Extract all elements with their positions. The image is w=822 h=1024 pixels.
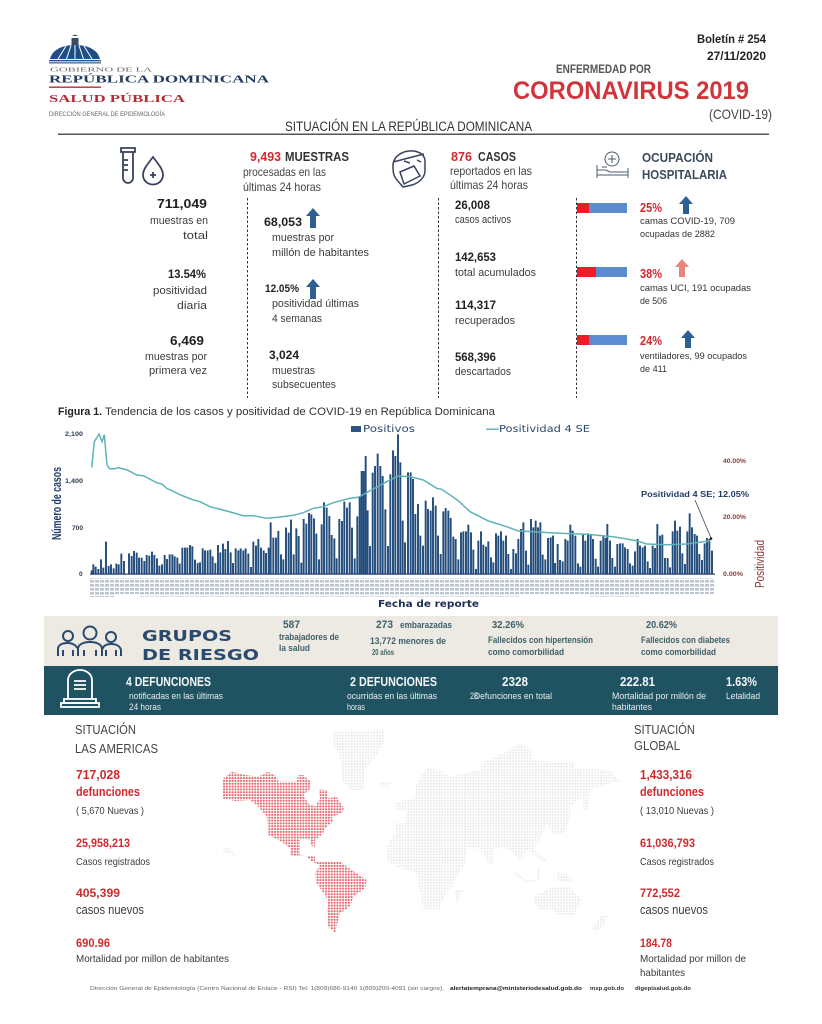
panel: situation in the Americas: defunciones	[76, 785, 140, 799]
column: case indicators: descartados	[455, 366, 511, 378]
logo: Gobierno de la República Dominicana, Salud Pública: GOBIERNO DE LA	[50, 68, 153, 74]
column: case indicators: recuperados	[455, 315, 515, 327]
stat: mortality: habitantes	[612, 702, 652, 713]
column: case indicators: total acumulados	[455, 267, 536, 279]
line: positivity 4 SE	[92, 434, 710, 545]
chart heading: Figura 1.	[58, 406, 102, 418]
panel: global situation: ( 13,010 Nuevas )	[640, 805, 714, 817]
bar: camas COVID-19	[577, 203, 627, 213]
stat: pregnant and minors: 20 años	[372, 648, 394, 657]
logo: Gobierno de la República Dominicana, Salud Pública	[49, 34, 270, 118]
column: sample totals: total	[183, 230, 208, 242]
arrow: up	[681, 330, 695, 348]
panel: hospital occupancy: 25%	[640, 201, 662, 215]
title	[513, 62, 772, 122]
panel: global situation: GLOBAL	[634, 738, 680, 753]
column: sample totals: diaria	[177, 300, 208, 312]
panel: global situation: 61,036,793	[640, 838, 695, 850]
chart heading: Tendencia de los casos y positividad de COVID-19 en República Dominicana	[105, 406, 496, 418]
panel: cases heading: últimas 24 horas	[450, 178, 528, 192]
axis labels: positivity: 40.00%	[723, 458, 746, 465]
footer: Dirección General de Epidemiología (Centro Nacional de Enlace - RSI) Tel: 1(809)686-9140 1(809)200-4091 (sin cargos).	[90, 986, 445, 992]
column: sample totals: positividad	[153, 285, 207, 297]
bulletin number and date: Boletín # 254	[697, 32, 766, 46]
panel: cases heading	[450, 149, 532, 192]
stat: occurred deaths	[347, 675, 437, 713]
panel: cases heading: reportados en las	[450, 164, 532, 178]
arrow: up light	[675, 259, 689, 277]
column: sample indicators: 68,053	[264, 215, 302, 229]
panel: samples heading: últimas 24 horas	[243, 180, 321, 194]
column: case indicators	[455, 200, 536, 378]
panel: situation in the Americas: 25,958,213	[76, 838, 130, 850]
stat: health workers	[279, 619, 339, 654]
heading: Grupos de riesgo	[142, 627, 259, 664]
column: sample indicators: 4 semanas	[272, 313, 322, 325]
stat: occurred deaths: ocurridas en las últimas	[347, 691, 437, 702]
panel: hospital occupancy: ventiladores, 99 ocupados	[640, 351, 747, 362]
icon: dome	[49, 34, 101, 64]
panel: situation in the Americas: 405,399	[76, 886, 120, 900]
heading: Grupos de riesgo: DE RIESGO	[142, 646, 259, 664]
panel: situation in the Americas	[75, 722, 229, 965]
column: sample indicators: subsecuentes	[272, 379, 336, 391]
panel: hospital occupancy: 24%	[640, 334, 662, 348]
axis labels: positivity: 0.00%	[723, 571, 743, 578]
stat: lethality	[726, 675, 760, 702]
stat: lethality: Letalidad	[726, 691, 760, 702]
panel: situation in the Americas: Mortalidad por millon de habitantes	[76, 953, 229, 965]
axis labels: cases: 0	[79, 571, 83, 578]
legend: Positividad 4 SE	[499, 424, 590, 435]
icon: test tube and drop	[121, 148, 163, 184]
stat: diabetes: como comorbilidad	[641, 647, 716, 658]
axis labels: positivity: 20.00%	[723, 514, 746, 521]
panel: samples heading: 9,493	[250, 149, 281, 164]
stat: hypertension	[488, 619, 593, 658]
footer: alertatemprana@ministeriodesalud.gob.do	[450, 986, 583, 992]
panel: global situation: SITUACIÓN	[634, 722, 695, 737]
bars: left half	[92, 434, 398, 574]
bars: right half	[400, 462, 712, 574]
stat: occurred deaths: 2 DEFUNCIONES	[350, 675, 437, 689]
panel: global situation: defunciones	[640, 785, 704, 799]
logo: Gobierno de la República Dominicana, Salud Pública: DIRECCIÓN GENERAL DE EPIDEMIOLOGÍA	[49, 111, 165, 118]
column: sample indicators: muestras por	[272, 232, 334, 244]
stat: health workers: trabajadores de	[279, 632, 339, 643]
stat: pregnant and minors: embarazadas	[400, 620, 452, 631]
axis labels: cases: 2,100	[65, 431, 83, 438]
panel: situation in the Americas: Casos registrados	[76, 856, 150, 868]
stat: mortality: Mortalidad por millón de	[612, 691, 706, 702]
stat: pregnant and minors: 13,772 menores de	[370, 636, 446, 647]
panel: global situation	[634, 722, 746, 979]
panel: hospital occupancy: 38%	[640, 267, 662, 281]
panel: hospital heading	[642, 150, 728, 182]
footer	[90, 986, 692, 992]
panel: global situation: casos nuevos	[640, 903, 708, 917]
callout: positivity value: Positividad 4 SE; 12.05%	[641, 490, 749, 499]
map: the Americas	[223, 772, 367, 933]
stat: hypertension: Fallecidos con hipertensión	[488, 635, 593, 646]
column: sample indicators: 3,024	[269, 348, 299, 362]
arrow: up	[306, 208, 320, 228]
bulletin number and date	[697, 32, 766, 63]
panel: samples heading: MUESTRAS	[285, 149, 349, 164]
column: case indicators: 114,317	[455, 300, 496, 312]
column: sample totals: muestras por	[145, 351, 207, 363]
panel: global situation: 1,433,316	[640, 768, 692, 782]
axis labels: cases: 1,400	[65, 478, 83, 485]
panel: hospital occupancy: de 411	[640, 364, 667, 375]
panel: cases heading: 876	[451, 149, 472, 164]
stat: notified deaths	[126, 675, 223, 713]
panel: cases heading: CASOS	[478, 149, 516, 164]
column: case indicators: 26,008	[455, 200, 491, 212]
stat: diabetes: 20.62%	[646, 619, 678, 631]
legend: Positivos	[363, 424, 415, 435]
section heading: SITUACIÓN EN LA REPÚBLICA DOMINICANA	[285, 119, 532, 134]
panel: global situation: Casos registrados	[640, 856, 714, 868]
bar: camas UCI	[577, 267, 627, 277]
panel: hospital occupancy: camas COVID-19, 709	[640, 216, 735, 227]
bar: ventiladores	[577, 335, 627, 345]
panel: hospital occupancy: ocupadas de 2882	[640, 229, 715, 240]
stat: total deaths: 28	[470, 691, 478, 702]
icon: gravestone	[61, 670, 99, 707]
panel: situation in the Americas: 717,028	[76, 768, 120, 782]
stat: hypertension: como comorbilidad	[488, 647, 564, 658]
footer: digepisalud.gob.do	[635, 986, 692, 992]
axis labels: cases: 700	[72, 525, 83, 532]
bulletin number and date: 27/11/2020	[707, 49, 766, 63]
stat: lethality: 1.63%	[726, 675, 757, 689]
axis labels: positivity	[723, 458, 746, 578]
stat: health workers: 587	[283, 619, 300, 631]
axis title: cases: Número de casos	[49, 467, 64, 540]
column: sample indicators	[264, 208, 369, 391]
date label band	[90, 578, 714, 597]
panel: global situation: 184.78	[640, 936, 672, 950]
stat: pregnant and minors	[370, 619, 452, 657]
column: sample indicators: muestras	[272, 365, 315, 377]
stat: notified deaths: notificadas en las últimas	[129, 691, 223, 702]
panel: situation in the Americas: SITUACIÓN	[75, 722, 136, 737]
footer: msp.gob.do	[590, 986, 625, 992]
stat: notified deaths: 4 DEFUNCIONES	[126, 675, 211, 689]
panel: hospital occupancy	[577, 196, 751, 375]
panel: hospital heading: OCUPACIÓN	[642, 150, 713, 165]
panel: situation in the Americas: LAS AMERICAS	[75, 741, 158, 756]
column: case indicators: casos activos	[455, 214, 511, 226]
icon: people	[58, 626, 121, 656]
column: sample totals: muestras en	[150, 215, 208, 227]
axis title: positivity: Positividad	[752, 540, 767, 588]
axis labels: cases	[65, 431, 83, 578]
column: sample indicators: positividad últimas	[272, 298, 359, 310]
dotted world map	[223, 730, 619, 933]
title: CORONAVIRUS 2019	[513, 77, 749, 105]
panel: deaths	[44, 666, 778, 715]
callout: positivity value	[641, 490, 749, 540]
column: sample totals: 13.54%	[168, 267, 206, 281]
column: case indicators: 568,396	[455, 352, 496, 364]
icon: hospital bed	[597, 152, 628, 178]
panel: situation in the Americas: ( 5,670 Nuevas )	[76, 805, 144, 817]
panel: global situation: 772,552	[640, 886, 680, 900]
map: rest of world	[223, 730, 619, 932]
panel: global situation: habitantes	[640, 967, 685, 979]
stat: total deaths: 2328	[502, 675, 528, 689]
column: sample totals: 711,049	[157, 196, 207, 211]
stat: diabetes	[641, 619, 730, 658]
combo chart: daily positives and 4-week positivity	[49, 424, 767, 610]
column: sample totals	[145, 196, 208, 377]
panel: hospital occupancy: camas UCI, 191 ocupadas	[640, 283, 751, 294]
column: sample totals: 6,469	[170, 333, 204, 348]
panel: global situation: Mortalidad por millon de	[640, 953, 746, 965]
panel: risk groups	[44, 616, 778, 666]
legend	[351, 424, 590, 435]
column: sample totals: primera vez	[149, 365, 207, 377]
stat: mortality: 222.81	[620, 675, 655, 689]
arrow: up	[306, 279, 320, 299]
stat: health workers: la salud	[279, 643, 310, 654]
stat: hypertension: 32.26%	[492, 619, 525, 631]
heading: Grupos de riesgo: GRUPOS	[142, 627, 232, 645]
panel: hospital heading: HOSPITALARIA	[642, 167, 728, 182]
panel: situation in the Americas: 690.96	[76, 936, 110, 950]
title: ENFERMEDAD POR	[556, 62, 651, 76]
stat: pregnant and minors: 273	[376, 619, 393, 631]
logo: Gobierno de la República Dominicana, Salud Pública: REPÚBLICA DOMINICANA	[49, 74, 270, 86]
stat: total deaths: Defunciones en total	[474, 691, 552, 702]
icon: masked face	[393, 151, 425, 187]
column: sample indicators: millón de habitantes	[272, 247, 369, 259]
stat: occurred deaths: horas	[347, 702, 365, 713]
arrow: up	[679, 196, 693, 214]
panel: samples heading: procesadas en las	[243, 165, 326, 179]
axis title: date: Fecha de reporte	[378, 599, 479, 610]
panel: samples heading	[243, 149, 349, 194]
panel: situation in the Americas: casos nuevos	[76, 903, 144, 917]
column: sample indicators: 12.05%	[265, 283, 299, 295]
logo: Gobierno de la República Dominicana, Salud Pública: SALUD PÚBLICA	[49, 93, 185, 105]
column: case indicators: 142,653	[455, 252, 496, 264]
title: (COVID-19)	[709, 106, 772, 122]
stat: notified deaths: 24 horas	[129, 702, 161, 713]
panel: hospital occupancy: de 506	[640, 296, 667, 307]
stat: diabetes: Fallecidos con diabetes	[641, 635, 730, 646]
stat: mortality	[612, 675, 706, 713]
stat: total deaths	[470, 675, 552, 702]
